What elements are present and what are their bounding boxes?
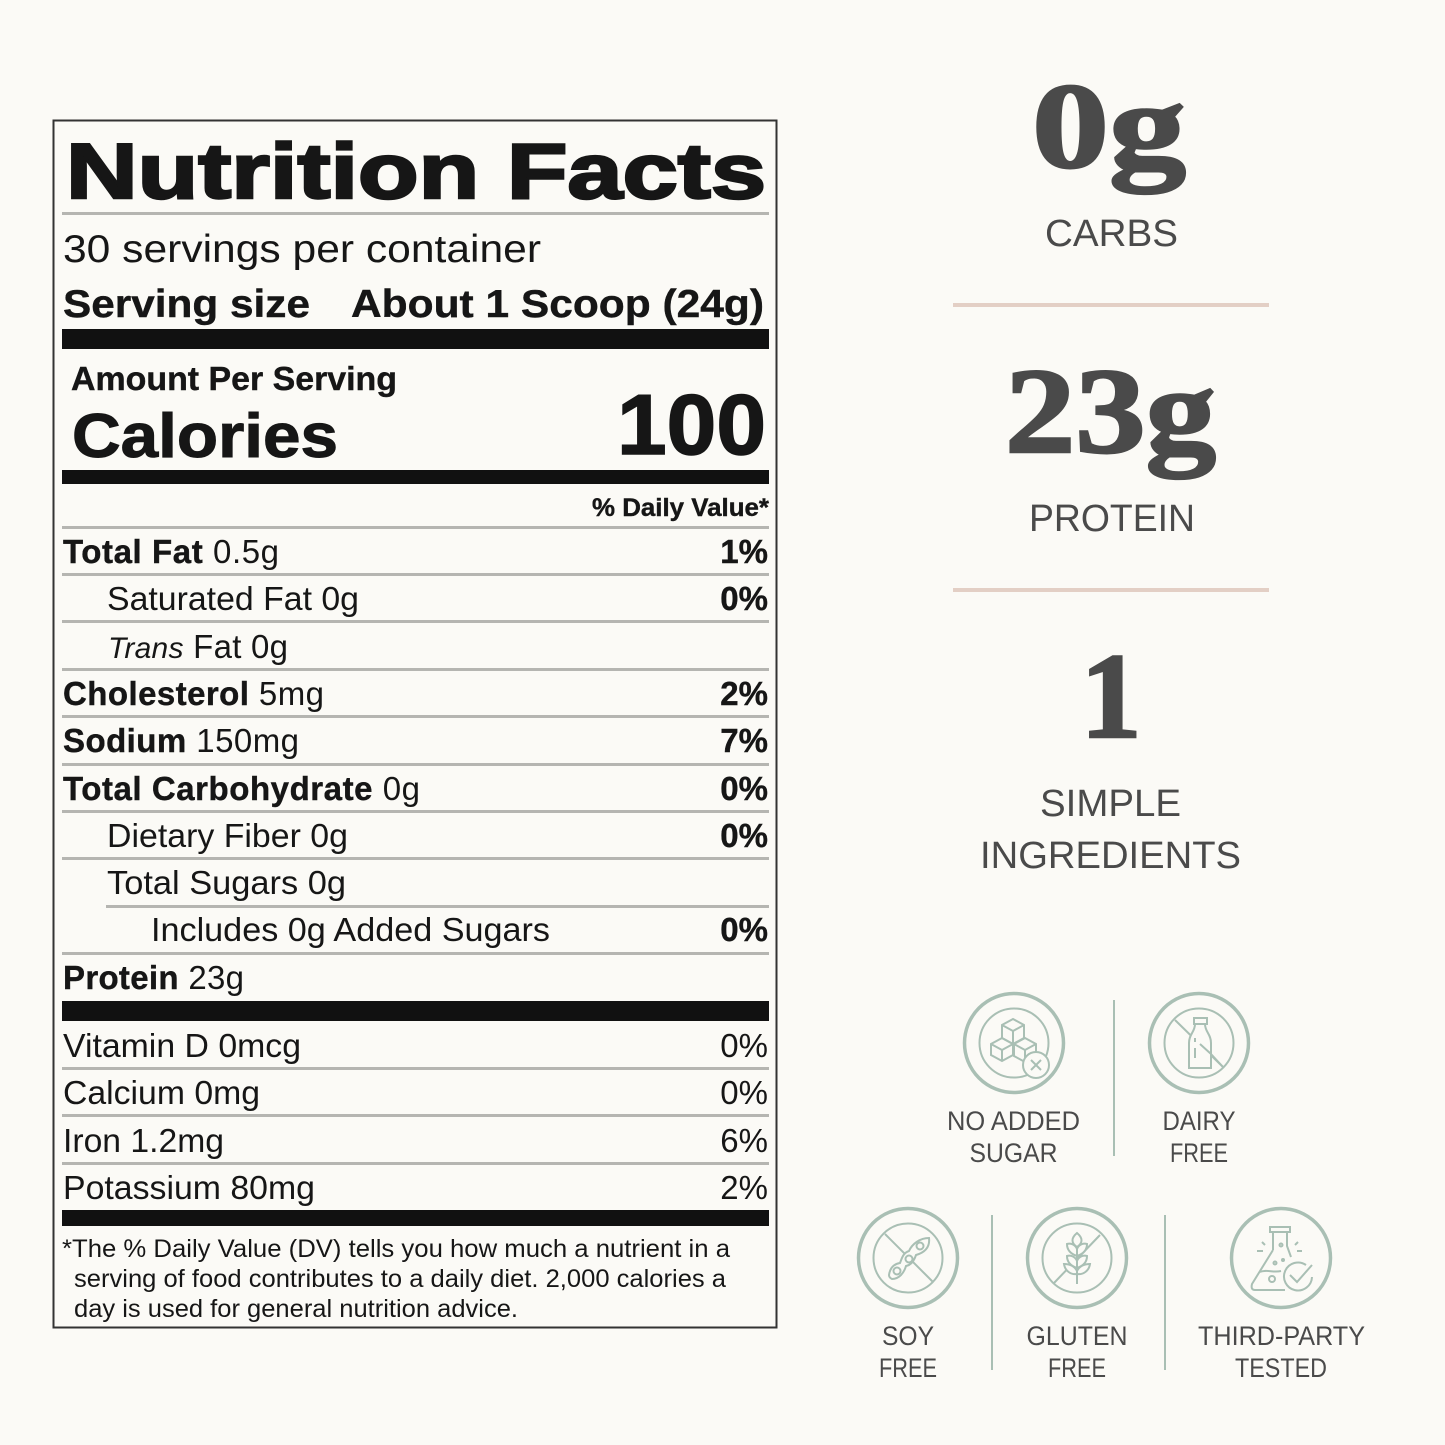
row: cholesterol: Cholesterol 5mg <box>63 675 324 712</box>
row: dietary fiber: Dietary Fiber 0g <box>107 817 348 854</box>
icon: gluten free <box>1028 1208 1126 1308</box>
row: calcium: 0% <box>720 1074 768 1111</box>
row: total carbohydrate <box>63 770 768 807</box>
row: total sugars: Total Sugars 0g <box>107 864 346 901</box>
row: saturated fat: Saturated Fat 0g <box>107 580 359 617</box>
footnote: *The % Daily Value (DV) tells you how much a nutrient in a <box>62 1235 730 1263</box>
row: calcium <box>63 1074 768 1111</box>
stat: 1 simple ingredients <box>980 629 1241 877</box>
row: saturated fat <box>107 580 768 617</box>
row: potassium: 2% <box>720 1169 768 1206</box>
row: vitamin d: 0% <box>720 1027 768 1064</box>
row: iron <box>63 1122 768 1159</box>
panel: nutrition facts label <box>54 120 776 1328</box>
serving size amount: About 1 Scoop (24g) <box>351 283 764 326</box>
row: total fat: 1% <box>720 533 768 570</box>
stat: 0g carbs: CARBS <box>1045 213 1178 255</box>
label: free: FREE <box>1048 1353 1106 1383</box>
row: protein: Protein 23g <box>63 959 244 996</box>
row: added sugars <box>151 911 768 948</box>
row: dietary fiber: 0% <box>720 817 768 854</box>
row: dietary fiber <box>107 817 768 854</box>
footnote: serving of food contributes to a daily diet. 2,000 calories a <box>74 1265 726 1293</box>
label: soy: SOY <box>882 1321 934 1351</box>
footnote: day is used for general nutrition advice. <box>74 1295 518 1323</box>
label: free: FREE <box>879 1353 937 1383</box>
row: iron: 6% <box>720 1122 768 1159</box>
stat: 0g carbs <box>1032 59 1186 255</box>
icon: dairy free <box>1150 994 1248 1092</box>
label: third-party: THIRD-PARTY <box>1198 1321 1365 1351</box>
row: saturated fat: 0% <box>720 580 768 617</box>
row: calcium: Calcium 0mg <box>63 1074 260 1111</box>
serving size: Serving size <box>63 283 310 326</box>
label: sugar: SUGAR <box>970 1138 1058 1168</box>
row: total fat <box>63 533 768 570</box>
servings text: 30 servings per container <box>63 228 541 271</box>
row: total fat: Total Fat 0.5g <box>63 533 279 570</box>
stat: 23g protein: PROTEIN <box>1029 498 1195 540</box>
icon: soy free <box>858 1208 958 1308</box>
label: tested: TESTED <box>1235 1353 1327 1383</box>
row: total carbohydrate: Total Carbohydrate 0g <box>63 770 420 807</box>
row: vitamin d <box>63 1027 768 1064</box>
label: gluten: GLUTEN <box>1026 1321 1128 1351</box>
row: sodium: Sodium 150mg <box>63 722 299 759</box>
label: no added sugar: NO ADDED <box>947 1106 1080 1136</box>
row: sodium: 7% <box>720 722 768 759</box>
row: added sugars: 0% <box>720 911 768 948</box>
icon: no added sugar <box>964 994 1064 1092</box>
row: cholesterol <box>63 675 768 712</box>
stat: 1 simple ingredients: INGREDIENTS <box>980 835 1241 877</box>
daily value header: % Daily Value* <box>592 494 769 522</box>
stat: 23g protein: 23g <box>1005 344 1216 479</box>
row: vitamin d: Vitamin D 0mcg <box>63 1027 301 1064</box>
stat: 23g protein <box>1005 344 1216 540</box>
row: cholesterol: 2% <box>720 675 768 712</box>
calories label: Calories <box>72 402 338 471</box>
calories value: 100 <box>617 378 766 473</box>
stat: 1 simple ingredients: SIMPLE <box>1040 783 1181 825</box>
stat: 1 simple ingredients: 1 <box>1080 629 1142 764</box>
icon: third-party tested <box>1232 1208 1330 1308</box>
row: potassium: Potassium 80mg <box>63 1169 315 1206</box>
row: added sugars: Includes 0g Added Sugars <box>151 911 550 948</box>
label: dairy: DAIRY <box>1162 1106 1236 1136</box>
row: potassium <box>63 1169 768 1206</box>
stat: 0g carbs: 0g <box>1032 59 1186 194</box>
heading: Nutrition Facts: Nutrition Facts <box>66 127 766 215</box>
row: total carbohydrate: 0% <box>720 770 768 807</box>
row: sodium <box>63 722 768 759</box>
label: free: FREE <box>1170 1138 1228 1168</box>
row: iron: Iron 1.2mg <box>63 1122 224 1159</box>
footnote <box>62 1235 730 1323</box>
amount per serving: Amount Per Serving <box>71 360 397 397</box>
row: trans fat: Trans Fat 0g <box>108 628 288 665</box>
